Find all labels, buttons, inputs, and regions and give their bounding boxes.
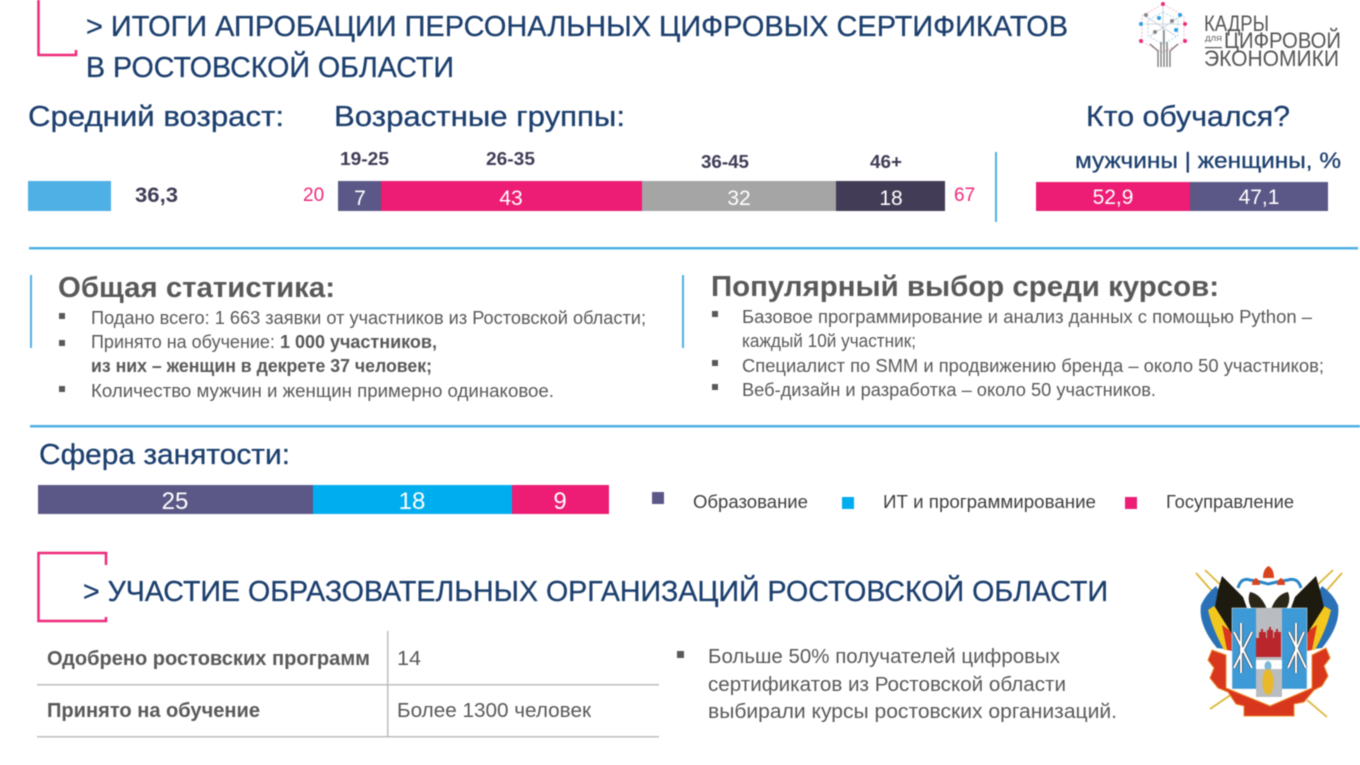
- title: > ИТОГИ АПРОБАЦИИ ПЕРСОНАЛЬНЫХ ЦИФРОВЫХ СЕРТИФИКАТОВ: [86, 11, 1068, 43]
- spears: [1196, 570, 1342, 717]
- table: Одобрено ростовских программ: [47, 648, 370, 670]
- logo: wordmark: КАДРЫ: [1204, 11, 1269, 36]
- heading: Популярный выбор среди курсов:: [711, 271, 1219, 303]
- red ribbon: [1208, 648, 1330, 716]
- employment stacked bar: [38, 485, 609, 515]
- logo: wordmark: ЦИФРОВОЙ: [1224, 28, 1341, 53]
- heading: who studied: Кто обучался?: [1086, 101, 1290, 133]
- age values: [354, 187, 903, 210]
- table: 14: [397, 648, 421, 670]
- title bracket: [38, 0, 76, 55]
- logo: wordmark: ЭКОНОМИКИ: [1204, 46, 1339, 71]
- age labels: 26-35: [486, 149, 535, 169]
- logo: wordmark: ДЛЯ: [1205, 36, 1222, 43]
- table: Более 1300 человек: [397, 700, 591, 722]
- bullet list: Базовое программирование и анализ данных с помощью Python –: [742, 307, 1312, 327]
- panel: popular courses: [682, 271, 1324, 400]
- gender bar: мужчины | женщины, %: [1075, 148, 1341, 173]
- title: В РОСТОВСКОЙ ОБЛАСТИ: [86, 50, 454, 84]
- bullet list: из них – женщин в декрете 37 человек;: [91, 356, 432, 376]
- shield: [1232, 608, 1307, 689]
- bullet list: Подано всего: 1 663 заявки от участников из Ростовской области;: [91, 308, 646, 328]
- flags: [1201, 586, 1232, 650]
- employment legend: Образование: [693, 492, 808, 512]
- bullet list: [59, 308, 646, 401]
- logo: tree icon: [1139, 2, 1187, 67]
- table: Принято на обучение: [47, 700, 260, 722]
- age labels: 46+: [870, 152, 902, 172]
- employment stacked bar: 25: [162, 488, 188, 515]
- employment stacked bar: 18: [399, 488, 425, 515]
- gender bar: 52,9: [1093, 186, 1133, 209]
- employment stacked bar: 9: [553, 488, 567, 515]
- icon: Rostov region coat of arms: [1196, 566, 1342, 717]
- age values: 18: [879, 187, 903, 210]
- heading: Общая статистика:: [58, 272, 335, 304]
- average age bar: 36,3: [135, 184, 178, 207]
- age values: 32: [727, 187, 751, 210]
- age segments: [338, 181, 945, 211]
- table: [37, 631, 659, 738]
- callout: more than half: выбирали курсы ростовских организаций.: [708, 701, 1117, 723]
- bullet list: [712, 307, 1324, 400]
- bullet list: Специалист по SMM и продвижению бренда – около 50 участников;: [742, 356, 1324, 376]
- gender bar: [1036, 148, 1341, 211]
- age values: 43: [499, 187, 523, 210]
- age labels: 19-25: [340, 149, 389, 169]
- employment legend: Госуправление: [1166, 492, 1294, 512]
- fortress: [1256, 627, 1281, 657]
- bullet list: Принято на обучение: 1 000 участников,: [91, 332, 437, 352]
- second section title: > УЧАСТИЕ ОБРАЗОВАТЕЛЬНЫХ ОРГАНИЗАЦИЙ РОСТОВСКОЙ ОБЛАСТИ: [83, 574, 1108, 608]
- gender bar: 47,1: [1239, 186, 1279, 209]
- average age bar: [28, 181, 178, 211]
- max age: 67: [954, 185, 975, 206]
- age labels: [340, 149, 902, 172]
- callout: more than half: Больше 50% получателей цифровых: [708, 646, 1060, 668]
- heading: employment: Сфера занятости:: [39, 439, 290, 471]
- heading: age groups: Возрастные группы:: [334, 101, 625, 133]
- callout: more than half: сертификатов из Ростовской области: [708, 674, 1066, 696]
- age values: 7: [354, 187, 366, 210]
- age labels: 36-45: [701, 152, 749, 172]
- vertical divider: [995, 152, 997, 222]
- callout: more than half: [677, 646, 1117, 723]
- wheat: [1264, 661, 1272, 671]
- logo: wordmark: [1204, 11, 1341, 71]
- bullet list: Количество мужчин и женщин примерно одинаковое.: [91, 381, 554, 401]
- crossed maces: [1234, 623, 1306, 673]
- employment legend: [652, 492, 1294, 512]
- mantle and crowns: [1238, 579, 1301, 588]
- heading: average age: Средний возраст:: [28, 101, 284, 133]
- second section bracket: [38, 553, 106, 621]
- bullet list: Веб-дизайн и разработка – около 50 участников.: [742, 380, 1156, 400]
- panel: general statistics: [30, 272, 646, 401]
- title: [86, 11, 1068, 84]
- employment legend: ИТ и программирование: [883, 492, 1096, 512]
- min age: 20: [303, 185, 324, 206]
- age groups stacked bar: [303, 149, 975, 211]
- bullet list: каждый 10й участник;: [742, 331, 916, 351]
- eagle wings: [1215, 576, 1247, 634]
